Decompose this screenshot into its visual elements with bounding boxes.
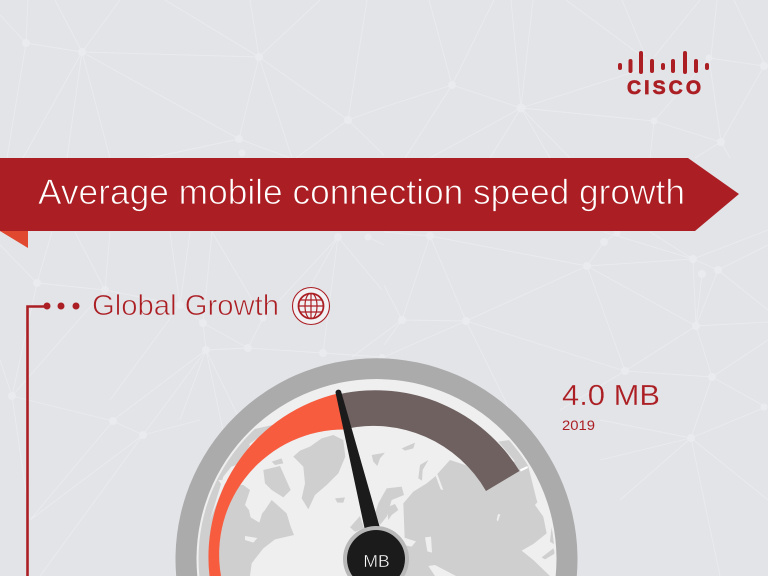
gauge outer ring bbox=[175, 358, 578, 576]
banner fold bbox=[0, 231, 28, 248]
title: Average mobile connection speed growth bbox=[38, 172, 685, 212]
arc: orange current speed bbox=[208, 393, 345, 576]
gauge inner disc bbox=[197, 379, 557, 576]
gauge hub bbox=[343, 526, 409, 576]
icon: globe bbox=[292, 288, 330, 324]
world map bbox=[195, 423, 557, 576]
Cisco logo bbox=[618, 51, 709, 99]
gauge needle bbox=[336, 390, 382, 535]
arc: brown projected growth bbox=[340, 390, 520, 491]
year label: 2019: 2019 bbox=[562, 418, 595, 433]
value label: 4.0 MB: 4.0 MB bbox=[562, 380, 660, 412]
heading: Global Growth: Global Growth bbox=[92, 290, 279, 322]
gauge hub: MB bbox=[363, 551, 390, 571]
speed gauge bbox=[175, 358, 578, 576]
connector line with dots bbox=[28, 302, 80, 576]
Cisco logo: CISCO bbox=[627, 77, 701, 99]
banner arrow bbox=[0, 158, 739, 231]
title banner bbox=[0, 158, 739, 248]
